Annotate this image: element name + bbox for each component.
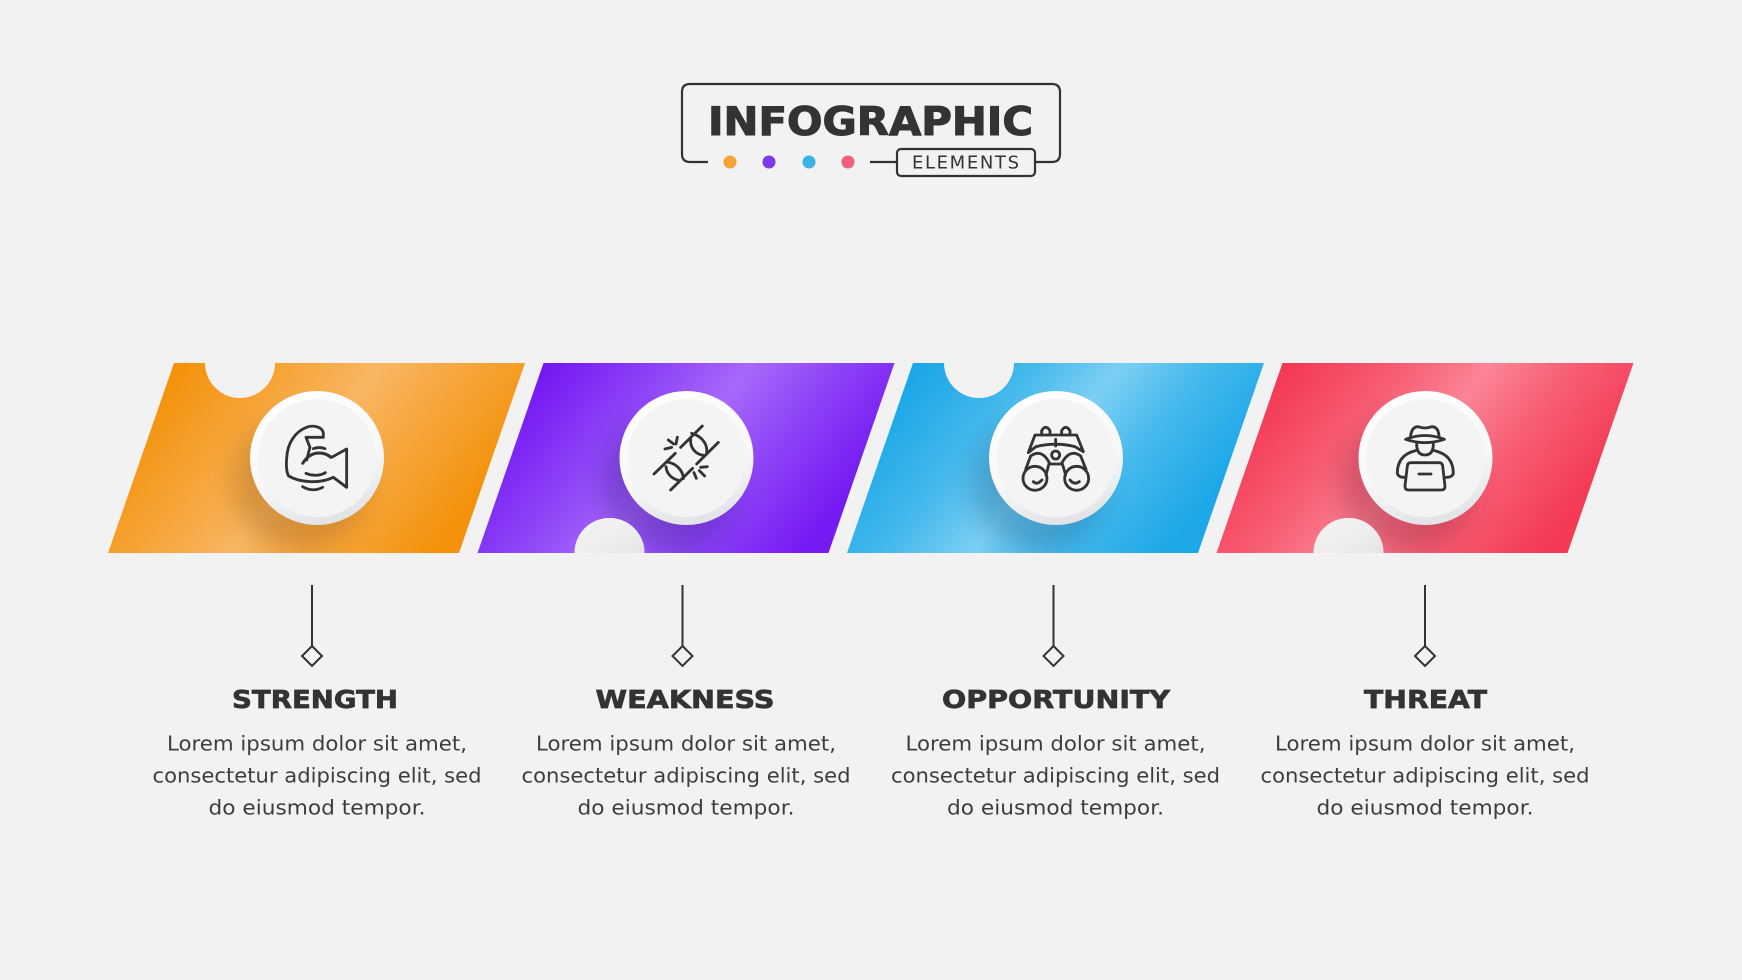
connector: threat bbox=[1415, 585, 1435, 666]
infographic canvas bbox=[108, 82, 1634, 819]
text block: threat: THREAT bbox=[1364, 685, 1487, 714]
subtitle box bbox=[897, 149, 1035, 176]
title frame bbox=[682, 84, 1060, 162]
text block: opportunity: Lorem ipsum dolor sit amet, bbox=[906, 732, 1206, 756]
text block: strength: Lorem ipsum dolor sit amet, bbox=[167, 732, 467, 756]
notch shade bbox=[574, 518, 644, 553]
text block: strength: consectetur adipiscing elit, sed bbox=[152, 764, 482, 788]
text block: opportunity: consectetur adipiscing elit, sed bbox=[891, 764, 1220, 788]
connector: strength bbox=[302, 585, 322, 666]
connector: weakness bbox=[672, 585, 692, 666]
text block: threat: consectetur adipiscing elit, sed bbox=[1260, 764, 1590, 788]
icon: binoculars bbox=[1023, 427, 1089, 490]
text block: opportunity bbox=[891, 685, 1220, 820]
icon: flexed arm bbox=[286, 426, 347, 490]
text block: strength bbox=[152, 685, 482, 820]
notch shade bbox=[1314, 518, 1384, 553]
text block: weakness: consectetur adipiscing elit, sed bbox=[522, 764, 850, 788]
button: strength bbox=[250, 391, 384, 525]
text block: weakness: WEAKNESS bbox=[596, 685, 774, 714]
button: threat bbox=[1358, 391, 1492, 525]
text block: opportunity: do eiusmod tempor. bbox=[947, 796, 1164, 820]
title text: INFOGRAPHIC bbox=[708, 100, 1033, 145]
panel: weakness bbox=[478, 363, 894, 553]
button: weakness bbox=[620, 391, 754, 525]
icon: hacker with laptop bbox=[1397, 427, 1453, 490]
text block: opportunity: OPPORTUNITY bbox=[942, 685, 1171, 714]
text block: strength: do eiusmod tempor. bbox=[208, 796, 426, 820]
subtitle box: ELEMENTS bbox=[912, 152, 1019, 174]
text block: threat: do eiusmod tempor. bbox=[1316, 796, 1534, 820]
colour dots bbox=[724, 156, 854, 168]
text block: threat: Lorem ipsum dolor sit amet, bbox=[1275, 732, 1575, 756]
title badge bbox=[682, 84, 1060, 176]
text block: weakness bbox=[522, 685, 850, 820]
text block: threat bbox=[1260, 685, 1590, 820]
text block: weakness: do eiusmod tempor. bbox=[578, 796, 794, 820]
panel: strength bbox=[108, 363, 525, 553]
text block: weakness: Lorem ipsum dolor sit amet, bbox=[536, 732, 836, 756]
icon: broken chain bbox=[654, 426, 718, 490]
button: opportunity bbox=[989, 391, 1123, 525]
panel: threat bbox=[1216, 363, 1634, 553]
connector: opportunity bbox=[1044, 585, 1064, 666]
text block: strength: STRENGTH bbox=[232, 685, 398, 714]
panel: opportunity bbox=[847, 363, 1264, 553]
